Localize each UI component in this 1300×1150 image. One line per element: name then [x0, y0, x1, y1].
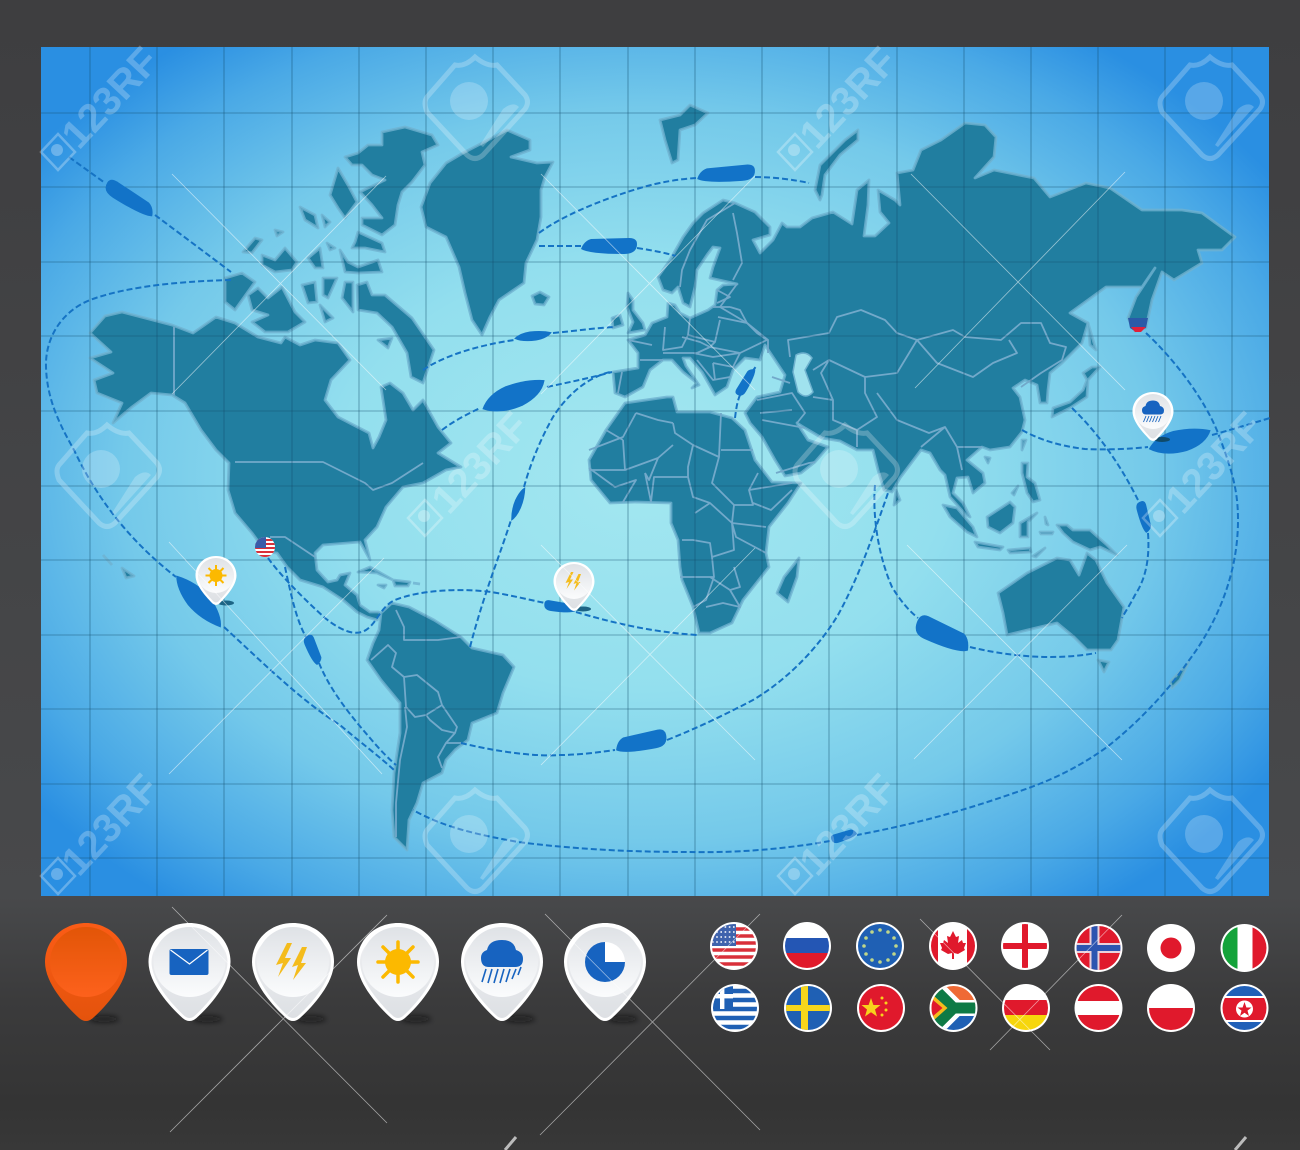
flag: Italy	[1220, 924, 1268, 972]
stamp	[425, 790, 528, 892]
icon: rain cloud	[481, 940, 523, 983]
New Guinea	[1057, 525, 1117, 555]
panel: country flags	[710, 922, 1268, 1034]
ship 6	[508, 485, 528, 523]
ship 8	[514, 329, 552, 343]
Japan and Sakhalin	[1052, 323, 1100, 417]
flag: Germany	[1002, 984, 1050, 1032]
Asia borders	[720, 284, 1066, 473]
pin: lightning	[252, 923, 334, 1022]
Madagascar	[777, 558, 799, 602]
ship 13	[1135, 500, 1153, 534]
Caspian Sea	[793, 353, 813, 396]
map grid	[41, 47, 1269, 896]
ship 2	[167, 569, 231, 633]
pin: sun	[357, 923, 439, 1022]
watermark text: 123RF	[423, 404, 538, 522]
flag: Norway	[1074, 924, 1122, 972]
panel: world map	[41, 39, 1272, 896]
Novaya Zemlya	[815, 130, 858, 200]
flag: European Union	[856, 922, 904, 970]
North America borders	[174, 327, 423, 557]
Svalbard	[660, 105, 708, 163]
flag: Sweden	[784, 984, 832, 1032]
small flag marker: Russia on Kamchatka	[1128, 318, 1148, 332]
stamp	[425, 57, 528, 158]
icon: envelope	[170, 949, 208, 975]
pin: rain cloud	[461, 923, 543, 1022]
flag: South Africa	[930, 984, 978, 1032]
small pin: sun	[196, 556, 236, 606]
watermark text: 123RF	[53, 39, 168, 157]
watermark text: 123RF	[791, 39, 906, 157]
flag: Russia	[783, 922, 831, 970]
ship 3	[302, 634, 324, 666]
flag: Canada	[929, 922, 977, 970]
Greenland	[421, 130, 553, 335]
Iceland	[532, 292, 549, 305]
pin: mail	[148, 923, 230, 1022]
small pin: rain cloud	[1132, 392, 1174, 442]
ship 10	[696, 164, 756, 184]
stamp	[795, 425, 898, 526]
pin: orange blank	[45, 923, 127, 1022]
stamp	[57, 425, 160, 526]
ship 7	[478, 373, 550, 419]
Eurasia	[613, 123, 1235, 517]
icon: sun	[378, 942, 418, 982]
flag: China	[857, 984, 905, 1032]
ship 9	[581, 238, 637, 254]
stamp	[1160, 57, 1262, 158]
South America	[367, 603, 514, 850]
ship 14	[912, 613, 974, 657]
watermark small icons	[41, 134, 1177, 894]
pin: pie chart	[564, 923, 646, 1022]
small flag marker: USA on the west coast	[255, 537, 275, 557]
ship 15	[830, 828, 858, 844]
Hawaii and Caribbean islands	[103, 555, 420, 588]
Europe borders	[618, 203, 767, 393]
ship 11	[734, 366, 758, 398]
ship 12	[1146, 423, 1214, 459]
flag: Poland	[1147, 984, 1195, 1032]
stamp	[1160, 790, 1262, 892]
Africa borders	[589, 413, 792, 607]
Australia	[998, 553, 1124, 650]
land masses	[90, 105, 1235, 850]
Canadian Arctic islands	[225, 127, 438, 383]
Southeast Asia islands	[894, 440, 1053, 557]
ship 4	[614, 728, 668, 756]
ship 5	[543, 600, 577, 614]
panel: large map pins	[45, 923, 646, 1022]
South America borders	[371, 610, 461, 837]
ships on routes	[102, 164, 1214, 844]
watermark text: 123RF	[53, 766, 168, 884]
flag: Japan	[1147, 924, 1195, 972]
ocean background	[41, 47, 1269, 896]
shipping routes (dashed)	[46, 157, 1270, 852]
flag: North Korea	[1220, 984, 1268, 1034]
country borders	[174, 203, 1066, 837]
Great Britain and Ireland	[612, 293, 645, 333]
flag: Austria	[1074, 984, 1122, 1032]
watermark stamps	[57, 57, 1262, 892]
inland seas	[793, 353, 813, 396]
small pin: lightning	[554, 562, 594, 612]
Africa	[589, 397, 801, 633]
watermark text: 123RF	[791, 766, 906, 884]
icon: two lightning bolts	[276, 943, 307, 980]
Tasmania and New Zealand	[1098, 660, 1189, 688]
bottom edge watermark marks	[505, 1137, 1246, 1150]
icon: pie	[585, 942, 625, 982]
watermark small icon discs	[51, 144, 1165, 880]
watermark text: 123RF	[1157, 404, 1272, 522]
watermark text	[53, 39, 1272, 884]
flag: England	[1001, 922, 1049, 970]
flag: Greece	[711, 984, 759, 1032]
thin diagonal watermark lines	[169, 172, 1127, 1135]
flag: USA	[710, 922, 758, 970]
North America	[90, 312, 461, 620]
ship 1	[102, 177, 158, 221]
